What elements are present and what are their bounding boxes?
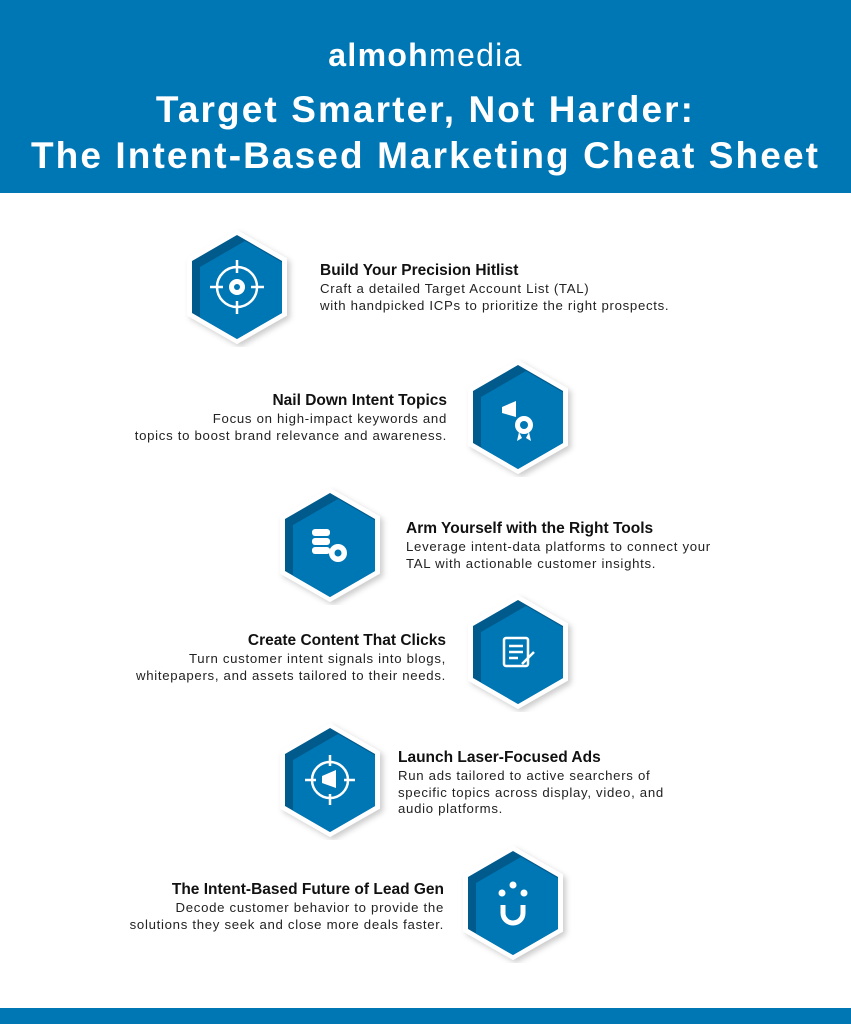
item 6 text: Decode customer behavior to provide the: [176, 900, 444, 915]
item 4 text: Turn customer intent signals into blogs,: [189, 651, 446, 666]
title: The Intent-Based Marketing Cheat Sheet: [31, 135, 820, 176]
item 2 text: Focus on high-impact keywords and: [213, 411, 447, 426]
item 6 text: [130, 881, 444, 932]
logo: almohmedia: [328, 37, 523, 73]
icon hex 1: target gear: [188, 232, 292, 347]
header banner: [0, 0, 851, 193]
item 3 text: Leverage intent-data platforms to connect your: [406, 539, 711, 554]
title: Target Smarter, Not Harder:: [156, 89, 695, 130]
item 2 text: Nail Down Intent Topics: [272, 392, 447, 409]
item 3 text: [406, 520, 711, 570]
icon hex 2: megaphone badge: [468, 362, 574, 477]
item 3 text: Arm Yourself with the Right Tools: [406, 520, 653, 537]
item 4 text: Create Content That Clicks: [248, 632, 446, 649]
icon hex 4: document edit: [468, 596, 574, 712]
icon hex 6: people magnet: [464, 848, 568, 963]
item 1 text: Craft a detailed Target Account List (TAL): [320, 281, 589, 296]
item 1 text: Build Your Precision Hitlist: [320, 262, 518, 279]
item 6 text: The Intent-Based Future of Lead Gen: [172, 881, 444, 898]
item 3 text: TAL with actionable customer insights.: [406, 556, 656, 570]
item 2 text: topics to boost brand relevance and awareness.: [135, 428, 447, 442]
item 5 text: Run ads tailored to active searchers of: [398, 768, 650, 783]
item 4 text: whitepapers, and assets tailored to their needs.: [136, 668, 446, 682]
item 4 text: [136, 632, 446, 682]
item 5 text: [398, 749, 664, 816]
footer bar: [0, 1008, 851, 1024]
item 2 text: [134, 392, 447, 442]
title: [31, 89, 820, 176]
icon hex 5: target megaphone: [280, 724, 386, 840]
item 6 text: solutions they seek and close more deals faster.: [130, 916, 444, 932]
item 5 text: audio platforms.: [398, 801, 503, 816]
item 5 text: Launch Laser-Focused Ads: [398, 749, 601, 766]
icon hex 3: database gear: [280, 490, 386, 605]
item 1 text: [320, 262, 669, 312]
item 1 text: with handpicked ICPs to prioritize the right prospects.: [320, 298, 669, 312]
item 5 text: specific topics across display, video, and: [398, 784, 664, 800]
